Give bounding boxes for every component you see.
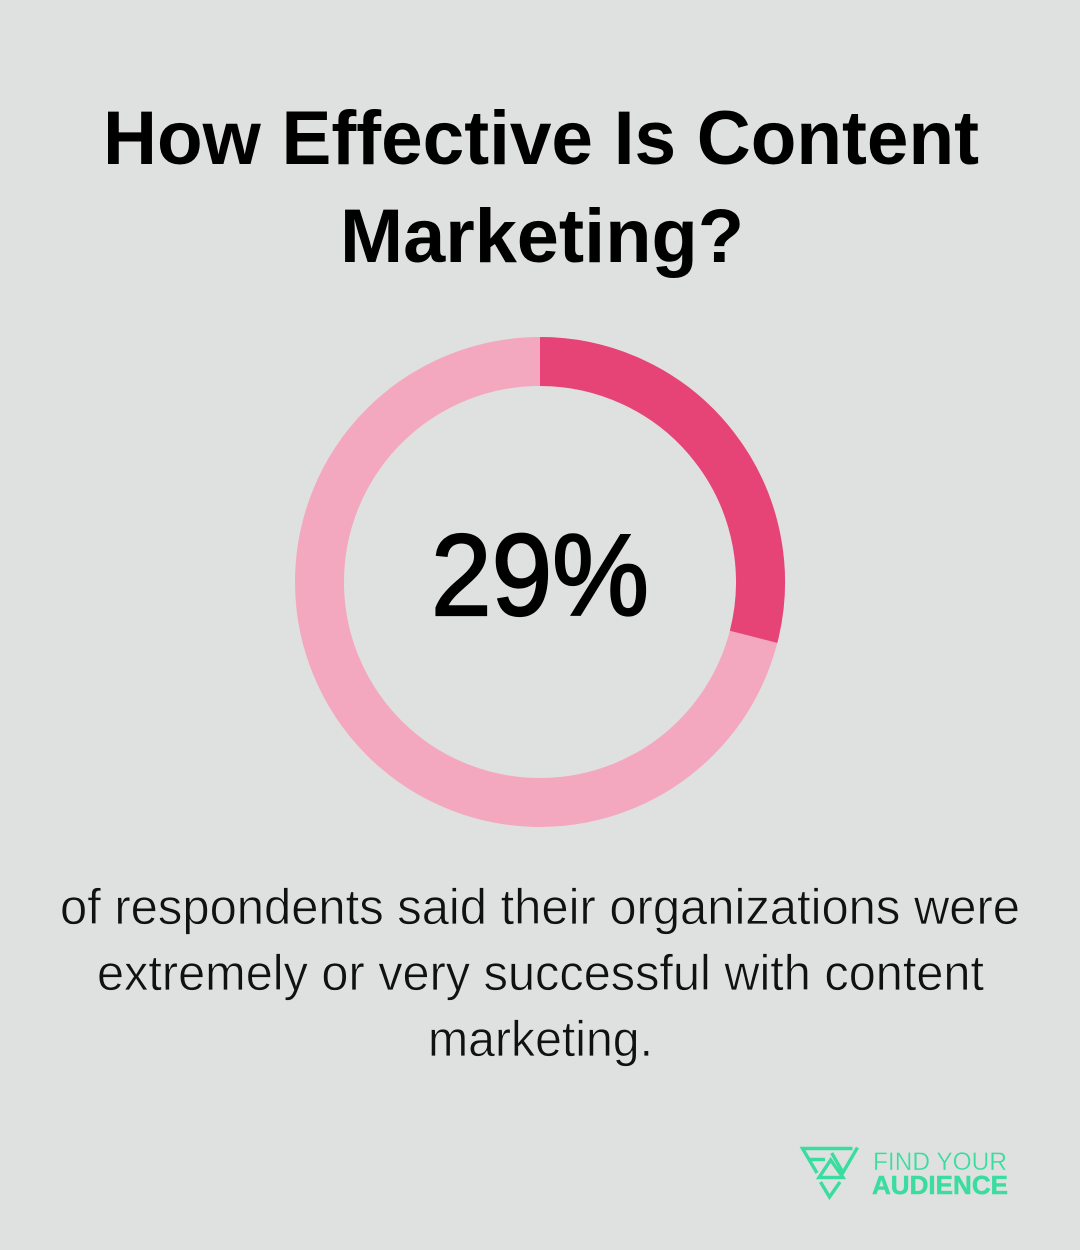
title (103, 96, 979, 279)
donut highlighted segment (540, 362, 761, 637)
percentage value: 29% (431, 510, 649, 640)
logo wordmark: AUDIENCE (872, 1170, 1008, 1200)
description text: of respondents said their organizations were (60, 879, 1020, 935)
donut chart: 29% (320, 362, 761, 802)
title: How Effective Is Content (103, 96, 979, 181)
description text: extremely or very successful with content (97, 945, 984, 1001)
description text: marketing. (428, 1011, 653, 1067)
logo wordmark (872, 1148, 1008, 1200)
donut track (320, 362, 760, 802)
title: Marketing? (340, 194, 744, 279)
description text (60, 879, 1020, 1067)
logo icon (802, 1148, 858, 1197)
logo wordmark: FIND YOUR (873, 1148, 1007, 1176)
logo: Find Your Audience (802, 1148, 1008, 1200)
